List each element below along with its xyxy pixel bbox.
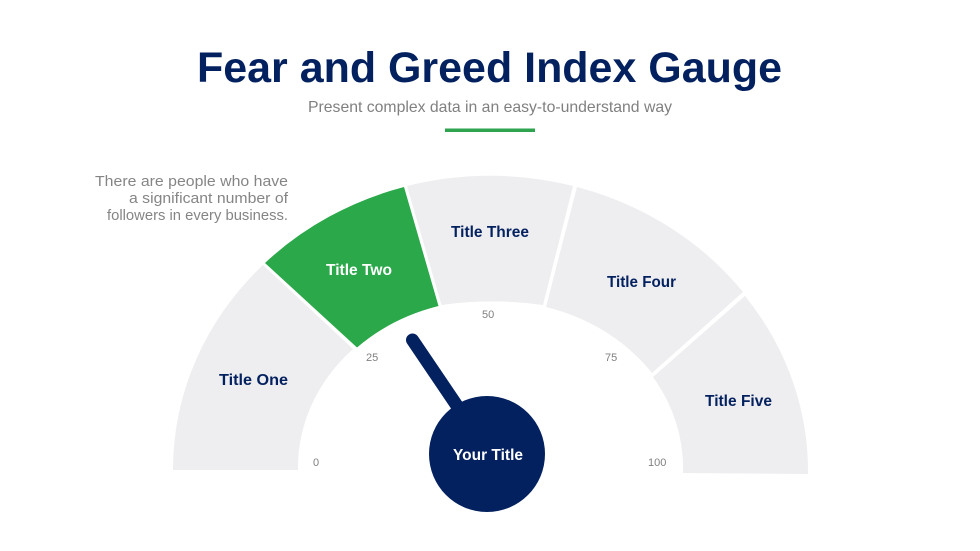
scale labels: 0 [313, 457, 319, 469]
center hub: Your Title [453, 447, 523, 464]
segment: title two [265, 187, 438, 348]
segment: title five: Title Five [705, 393, 772, 410]
needle [412, 340, 470, 425]
description text: followers in every business. [107, 207, 288, 224]
scale labels: 25 [366, 352, 378, 364]
accent underline [445, 128, 535, 132]
segment: title one: Title One [219, 372, 288, 389]
description text [95, 173, 289, 224]
segment: title one [173, 265, 353, 470]
subtitle: Present complex data in an easy-to-understand way [308, 99, 672, 116]
scale labels [313, 309, 666, 469]
segment: title four: Title Four [607, 274, 676, 291]
description text: a significant number of [129, 190, 289, 207]
scale labels: 100 [648, 457, 666, 469]
segment: title four [546, 187, 743, 373]
segment: title two: Title Two [326, 262, 392, 279]
title: Fear and Greed Index Gauge [197, 44, 782, 92]
scale labels: 50 [482, 309, 494, 321]
center hub [429, 396, 545, 512]
segment: title three: Title Three [451, 224, 529, 241]
description text: There are people who have [95, 173, 288, 190]
gauge [173, 176, 808, 474]
segment: title five [653, 296, 808, 474]
segment: title three [407, 176, 573, 305]
scale labels: 75 [605, 352, 617, 364]
